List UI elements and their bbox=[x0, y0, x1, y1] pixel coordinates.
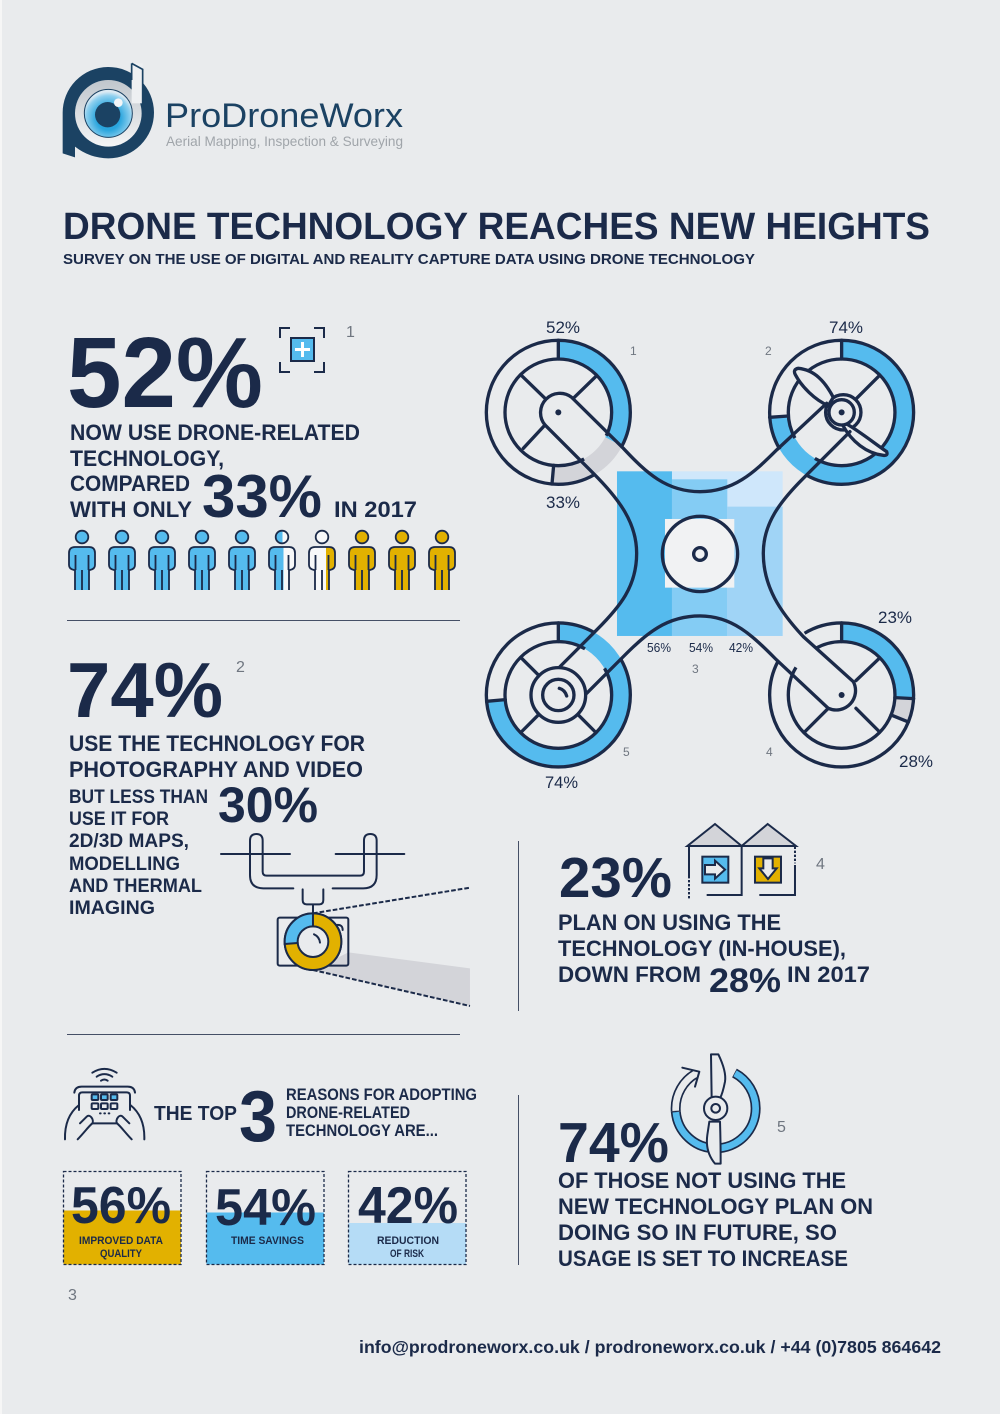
heading: top 3 reasons: DRONE-RELATED bbox=[286, 1104, 410, 1122]
body colour blocks bbox=[617, 471, 783, 636]
text block: photography: USE THE TECHNOLOGY FOR bbox=[69, 731, 365, 756]
box: time savings: 54% bbox=[215, 1179, 316, 1237]
diagram percent labels: 23% bbox=[878, 608, 912, 627]
stat: 23%: 23% bbox=[559, 846, 672, 910]
diagram percent labels: 28% bbox=[899, 752, 933, 771]
heading: top 3 reasons: 3 bbox=[239, 1077, 277, 1157]
text block: in-house: TECHNOLOGY (IN-HOUSE), bbox=[558, 936, 846, 961]
note number 5: 5 bbox=[777, 1119, 786, 1136]
text block: in-house: DOWN FROM bbox=[558, 962, 701, 987]
subtitle: SURVEY ON THE USE OF DIGITAL AND REALITY CAPTURE DATA USING DRONE TECHNOLOGY bbox=[63, 251, 755, 268]
diagram note numbers: 5 bbox=[623, 745, 630, 759]
text block: in-house: PLAN ON USING THE bbox=[558, 910, 781, 935]
text block: usage: 33% bbox=[202, 463, 322, 530]
contact details: info@prodroneworx.co.uk / prodroneworx.co.uk / +44 (0)7805 864642 bbox=[359, 1337, 941, 1357]
icon: focus target bbox=[280, 328, 324, 372]
text block: usage bbox=[70, 420, 417, 530]
drone diagram bbox=[486, 318, 933, 792]
text block: photography: 30% bbox=[218, 777, 318, 833]
drone body and rotors bbox=[486, 340, 914, 767]
logo name: ProDroneWorx bbox=[165, 97, 403, 135]
text block: usage: IN 2017 bbox=[334, 497, 417, 522]
text block: photography: PHOTOGRAPHY AND VIDEO bbox=[69, 757, 363, 782]
diagram percent labels: 74% bbox=[545, 773, 578, 792]
box: improved data quality: IMPROVED DATA bbox=[79, 1235, 163, 1247]
diagram percent labels: 54% bbox=[689, 641, 713, 655]
box: reduction of risk: 42% bbox=[358, 1177, 458, 1235]
rotor 1 bbox=[486, 340, 630, 484]
note number 3: 3 bbox=[68, 1287, 77, 1304]
text block: usage: NOW USE DRONE-RELATED bbox=[70, 420, 360, 445]
title: DRONE TECHNOLOGY REACHES NEW HEIGHTS bbox=[63, 206, 930, 248]
diagram note numbers: 1 bbox=[630, 344, 637, 358]
box: time savings bbox=[206, 1172, 324, 1264]
diagram note numbers: 4 bbox=[766, 745, 773, 759]
box: improved data quality bbox=[64, 1172, 181, 1264]
heading: top 3 reasons: REASONS FOR ADOPTING bbox=[286, 1086, 477, 1104]
text block: future use: USAGE IS SET TO INCREASE bbox=[558, 1246, 848, 1271]
diagram percent labels: 56% bbox=[647, 641, 671, 655]
diagram percent labels: 52% bbox=[546, 318, 580, 337]
stat: 74% future use: 74% bbox=[558, 1111, 669, 1175]
text block: in-house: IN 2017 bbox=[787, 962, 870, 987]
heading: top 3 reasons: THE TOP bbox=[154, 1103, 237, 1125]
box: improved data quality: 56% bbox=[71, 1177, 171, 1235]
diagram note numbers: 2 bbox=[765, 344, 772, 358]
logo tagline: Aerial Mapping, Inspection & Surveying bbox=[166, 133, 403, 149]
text block: in-house: 28% bbox=[709, 962, 781, 1000]
diagram note numbers: 3 bbox=[692, 662, 699, 676]
text block: photography bbox=[69, 731, 365, 919]
rotor 2 bbox=[770, 340, 914, 484]
icon: tablet controller bbox=[65, 1069, 144, 1139]
box: reduction of risk: REDUCTION bbox=[377, 1235, 439, 1247]
heading: top 3 reasons bbox=[154, 1077, 477, 1157]
rotor 4 bbox=[770, 623, 914, 767]
text block: photography: USE IT FOR bbox=[69, 809, 169, 830]
box: reduction of risk bbox=[348, 1172, 466, 1264]
diagram note numbers bbox=[623, 344, 773, 759]
stat: 74% photography: 74% bbox=[67, 646, 223, 734]
text block: photography: IMAGING bbox=[69, 898, 155, 919]
diagram percent labels: 42% bbox=[729, 641, 753, 655]
airframe outline bbox=[541, 393, 856, 710]
text block: photography: MODELLING bbox=[69, 854, 180, 875]
heading: top 3 reasons: TECHNOLOGY ARE... bbox=[286, 1122, 438, 1140]
illustration: drone camera bbox=[221, 834, 470, 1006]
pictogram: ten people bbox=[69, 531, 455, 590]
text block: future use bbox=[558, 1168, 873, 1271]
text block: future use: DOING SO IN FUTURE, SO bbox=[558, 1220, 837, 1245]
logo bbox=[63, 63, 403, 158]
text block: future use: OF THOSE NOT USING THE bbox=[558, 1168, 846, 1193]
box: improved data quality: QUALITY bbox=[100, 1248, 143, 1260]
logo mark bbox=[63, 63, 154, 158]
note number 4: 4 bbox=[816, 856, 825, 873]
icon: propeller with circular arrow bbox=[676, 1054, 756, 1164]
diagram percent labels: 33% bbox=[546, 493, 580, 512]
text block: photography: AND THERMAL bbox=[69, 876, 202, 897]
box: reduction of risk: OF RISK bbox=[390, 1248, 424, 1260]
diagram percent labels: 74% bbox=[829, 318, 863, 337]
text block: photography: BUT LESS THAN bbox=[69, 787, 208, 808]
stat: 52%: 52% bbox=[67, 317, 263, 429]
icon: two houses bbox=[687, 824, 796, 898]
diagram percent labels bbox=[545, 318, 933, 792]
text block: usage: TECHNOLOGY, bbox=[70, 446, 224, 471]
text block: usage: WITH ONLY bbox=[70, 497, 192, 522]
note number 1: 1 bbox=[346, 324, 355, 341]
text block: future use: NEW TECHNOLOGY PLAN ON bbox=[558, 1194, 873, 1219]
central hub bbox=[662, 516, 738, 592]
note number 2: 2 bbox=[236, 659, 245, 676]
text block: usage: COMPARED bbox=[70, 471, 190, 496]
text block: in-house bbox=[558, 910, 870, 1000]
text block: photography: 2D/3D MAPS, bbox=[69, 831, 189, 852]
rotor 5 bbox=[486, 623, 630, 767]
box: time savings: TIME SAVINGS bbox=[231, 1235, 304, 1247]
